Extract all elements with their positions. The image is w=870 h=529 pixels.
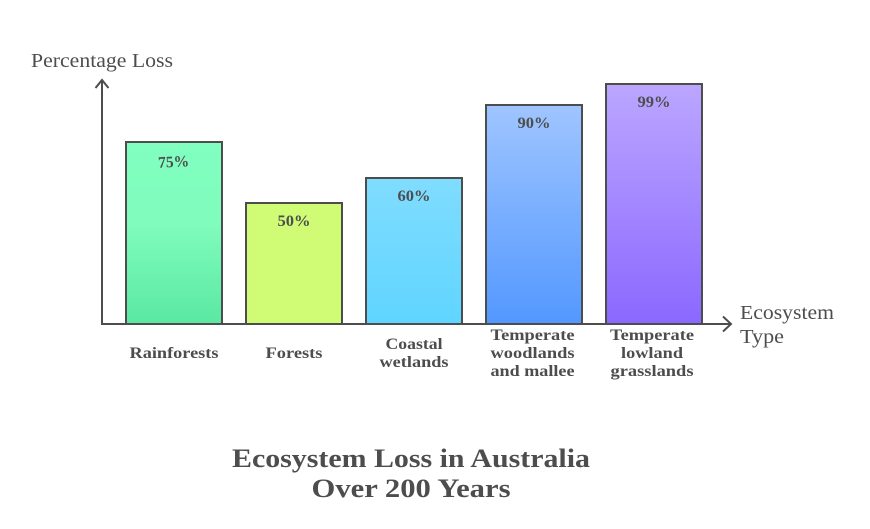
label: Temperate lowland grasslands: Temperate [610,327,694,344]
label: Coastal wetlands: Coastal [386,336,443,353]
bar: Rainforests 75% [126,142,222,324]
arrow: vertical axis [96,80,108,324]
bar: Coastal wetlands 60%: 60% [398,188,430,205]
bar: Forests 50% [246,203,342,324]
x-axis label: Ecosystem [740,302,834,324]
bar: Forests 50%: 50% [278,213,310,230]
label: Coastal wetlands: wetlands [380,354,448,371]
label: Forests: Forests [266,345,322,362]
bar: Temperate lowland grasslands 99%: 99% [638,94,670,111]
label: Temperate woodlands and mallee: and mallee [490,363,575,380]
label: Temperate woodlands and mallee: woodlands [490,345,574,362]
bar: Temperate woodlands and mallee 90% [486,105,582,324]
arrow: horizontal axis [101,316,731,332]
label: Rainforests: Rainforests [130,345,218,362]
label: Temperate lowland grasslands: lowland [621,345,683,362]
title: Over 200 Years [312,474,510,503]
bar: Coastal wetlands 60% [366,178,462,324]
x-axis label: Type [740,326,784,348]
bar: Temperate lowland grasslands 99% [606,84,702,324]
label: Temperate woodlands and mallee: Temperate [490,327,575,344]
y-axis label: Percentage Loss [31,50,173,72]
label: Temperate lowland grasslands: grasslands [610,363,694,380]
title: Ecosystem Loss in Australia [232,444,590,473]
bar: Temperate woodlands and mallee 90%: 90% [518,115,550,132]
bar: Rainforests 75%: 75% [158,153,190,172]
